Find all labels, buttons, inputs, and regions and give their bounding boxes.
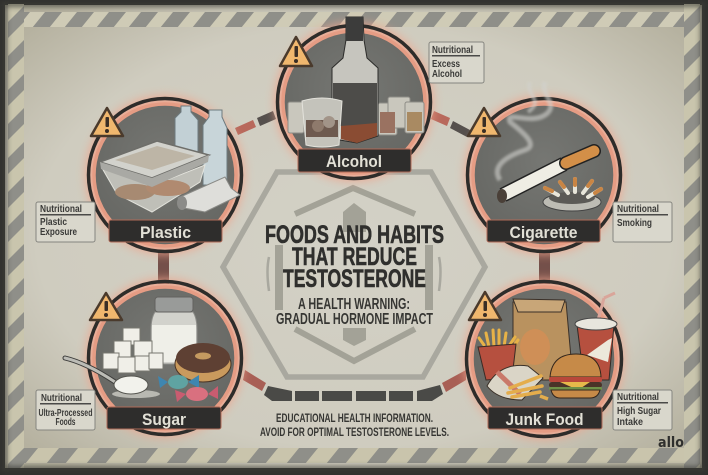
callout: smoking: Smoking bbox=[617, 218, 652, 229]
callout: high sugar intake: High Sugar bbox=[617, 406, 661, 417]
icon: paper bag, fries, cup and burger bbox=[478, 293, 617, 400]
icon: warning triangle bbox=[91, 108, 123, 136]
label: plastic: Plastic bbox=[140, 223, 191, 242]
callout: high sugar intake bbox=[613, 390, 672, 430]
callout: high sugar intake: Intake bbox=[617, 417, 643, 428]
callout: plastic exposure bbox=[36, 202, 95, 242]
icon: warning triangle bbox=[280, 37, 312, 66]
label: sugar bbox=[107, 407, 221, 429]
footer note: EDUCATIONAL HEALTH INFORMATION. bbox=[276, 411, 433, 425]
icon: sugar jar, cubes, spoon, donut and candies bbox=[65, 297, 231, 402]
label: junk food bbox=[488, 407, 602, 429]
label: plastic bbox=[109, 220, 222, 242]
connector: plastic to sugar bbox=[158, 250, 169, 284]
footer note: AVOID FOR OPTIMAL TESTOSTERONE LEVELS. bbox=[260, 425, 449, 439]
subtitle: GRADUAL HORMONE IMPACT bbox=[276, 311, 433, 328]
hexagon emblem bbox=[223, 172, 485, 377]
callout: excess alcohol bbox=[429, 42, 484, 83]
footer note bbox=[260, 411, 449, 439]
label: cigarette bbox=[487, 220, 600, 242]
panel: junk food bbox=[464, 279, 624, 439]
icon: cigarette, smoke and ashtray bbox=[497, 82, 601, 211]
callout: plastic exposure: Exposure bbox=[40, 227, 77, 238]
icon: warning triangle bbox=[469, 292, 501, 320]
icon: warning triangle bbox=[468, 108, 500, 136]
label: alcohol: Alcohol bbox=[326, 152, 382, 171]
label: cigarette: Cigarette bbox=[510, 223, 578, 242]
panel: sugar bbox=[65, 279, 244, 437]
title: THAT REDUCE bbox=[292, 243, 417, 271]
callout: plastic exposure: Plastic bbox=[40, 217, 67, 228]
connector: alcohol to plastic bbox=[235, 111, 276, 135]
callout: ultra-processed foods: Foods bbox=[56, 417, 76, 428]
label: junk food: Junk Food bbox=[506, 410, 584, 429]
callout: excess alcohol: Excess bbox=[432, 59, 460, 70]
icon: warning triangle bbox=[90, 293, 122, 320]
logo: allo: allo bbox=[658, 435, 684, 451]
callout: excess alcohol: Nutritional bbox=[432, 45, 473, 56]
title: TESTOSTERONE bbox=[283, 265, 426, 293]
callout: high sugar intake: Nutritional bbox=[617, 392, 659, 403]
panel: alcohol bbox=[275, 17, 433, 181]
title: FOODS AND HABITS bbox=[265, 221, 444, 249]
callout: ultra-processed foods: Nutritional bbox=[41, 393, 82, 404]
label: alcohol bbox=[298, 149, 411, 172]
subtitle bbox=[276, 296, 433, 328]
icon: plastic container, bottles and roll bbox=[100, 106, 240, 212]
subtitle: A HEALTH WARNING: bbox=[298, 296, 410, 313]
callout: ultra-processed foods bbox=[36, 390, 95, 430]
connector: alcohol to cigarette bbox=[431, 111, 470, 137]
label: sugar: Sugar bbox=[142, 410, 186, 429]
panel: plastic bbox=[86, 96, 244, 254]
panel: cigarette bbox=[465, 82, 623, 254]
callout: smoking: Nutritional bbox=[617, 204, 659, 215]
connector: cigarette to junk food bbox=[539, 250, 550, 284]
callout: smoking bbox=[613, 202, 672, 242]
title bbox=[265, 221, 444, 293]
connector: bottom segmented bar bbox=[243, 370, 466, 401]
callout: ultra-processed foods: Ultra-Processed bbox=[38, 408, 92, 419]
icon: alcohol bottle and glasses bbox=[288, 17, 424, 147]
callout: plastic exposure: Nutritional bbox=[40, 204, 82, 215]
callout: excess alcohol: Alcohol bbox=[432, 69, 462, 80]
